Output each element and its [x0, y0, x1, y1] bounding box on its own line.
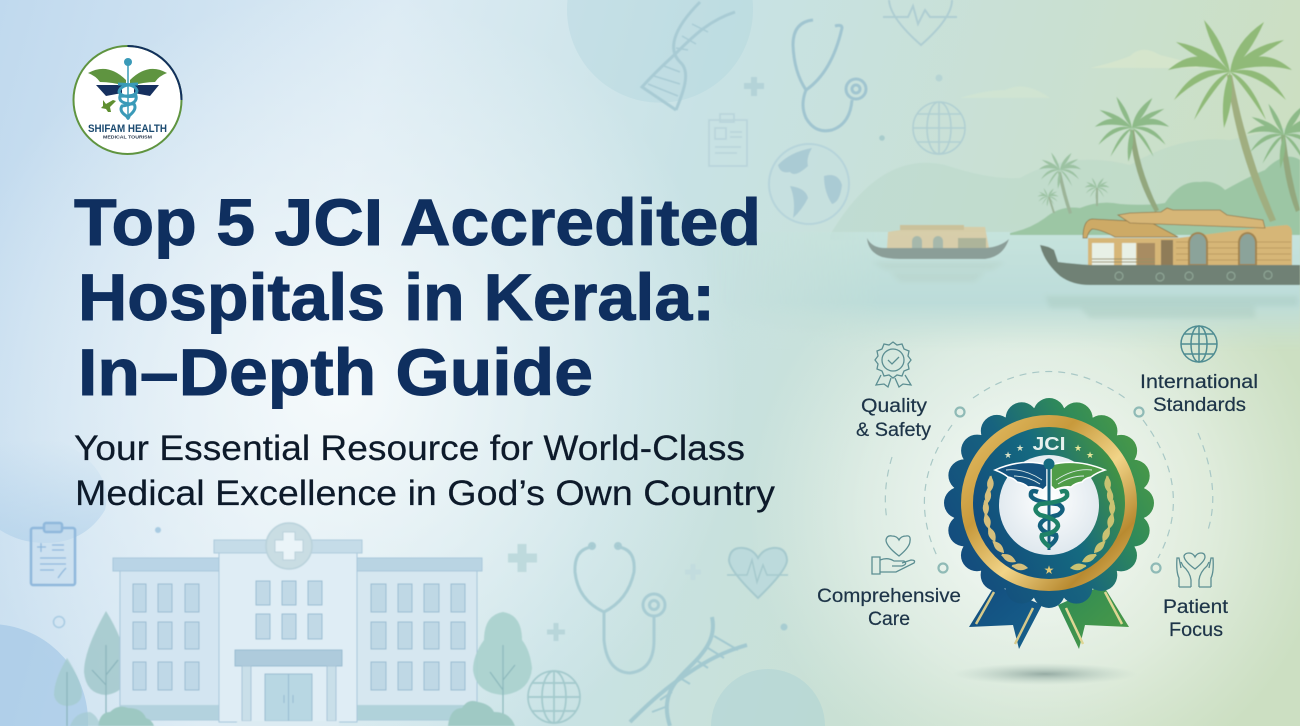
icon: hands and heart — [1177, 553, 1213, 587]
badge shadow — [953, 663, 1137, 685]
hull — [1040, 245, 1300, 285]
arched windows — [1189, 233, 1256, 265]
upper roof — [1118, 208, 1265, 228]
palm: medium — [1095, 97, 1169, 212]
feature: patient focus — [1163, 553, 1229, 641]
large houseboat — [1040, 208, 1300, 285]
icon: hand holding heart — [872, 536, 915, 574]
feature: international standards: Standards — [1153, 395, 1246, 416]
icon: dna — [630, 617, 747, 726]
JCI label: JCI — [1032, 434, 1066, 454]
icon: earth — [769, 144, 849, 224]
JCI badge — [953, 407, 1145, 685]
water — [814, 232, 1300, 335]
logo wings — [88, 69, 167, 96]
kerala backwater scene — [814, 20, 1300, 335]
palm: tall — [1168, 20, 1292, 222]
title: Hospitals in Kerala: — [78, 260, 715, 334]
feature: international standards: International — [1140, 372, 1258, 393]
title — [74, 185, 761, 409]
left wing — [113, 558, 219, 720]
subtitle: Medical Excellence in God’s Own Country — [75, 474, 776, 513]
logo plane — [101, 100, 116, 112]
faint medical icons bottom — [31, 523, 788, 726]
icon: heart pulse — [727, 548, 788, 598]
icon: globe — [528, 671, 580, 723]
icon: plus small — [547, 623, 565, 641]
stars: ★ — [1004, 450, 1012, 460]
white centre — [999, 455, 1099, 555]
stars: ★ — [1016, 443, 1024, 453]
small houseboat reflection — [872, 262, 1005, 282]
mooring rings — [1115, 271, 1272, 281]
dots — [936, 74, 942, 82]
left tree group — [54, 611, 128, 726]
stars: ★ — [1086, 450, 1094, 460]
orbit nodes — [938, 408, 1160, 572]
logo caduceus — [118, 58, 138, 120]
porch openings — [1092, 243, 1114, 265]
right tree and bushes — [70, 612, 532, 726]
icon: stethoscope — [575, 544, 665, 673]
right wing — [357, 558, 482, 720]
icon: clipboard top — [709, 114, 747, 166]
stars: ★ — [1044, 563, 1054, 577]
ribbon right — [1058, 585, 1129, 649]
feature: quality and safety — [856, 342, 932, 441]
island treeline — [1010, 157, 1300, 235]
laurel right — [1070, 475, 1119, 574]
hospital illustration — [54, 523, 532, 726]
icon: wire globe — [913, 102, 965, 154]
icon: clipboard — [31, 523, 75, 585]
logo: Shifam Health — [74, 46, 182, 154]
subtitle — [74, 429, 776, 513]
distant hills — [830, 50, 1300, 240]
caduceus — [995, 458, 1105, 550]
scalloped seal — [953, 407, 1145, 599]
feature: quality and safety: & Safety — [856, 420, 932, 441]
icon: heart pulse top — [883, 0, 957, 45]
faint medical icons top — [642, 0, 965, 224]
feature: comprehensive care: Care — [868, 609, 910, 630]
centre block — [214, 523, 362, 726]
ribbon left — [969, 585, 1042, 649]
palm: right edge — [1247, 104, 1300, 212]
icon: plus left — [508, 544, 537, 572]
stars — [1004, 443, 1094, 577]
icon: dna top — [642, 2, 735, 110]
subtitle: Your Essential Resource for World-Class — [74, 429, 745, 468]
logo tagline: MEDICAL TOURISM — [103, 134, 152, 140]
feature: patient focus: Patient — [1163, 597, 1229, 618]
icon: globe — [1181, 326, 1217, 362]
stars: ★ — [1074, 443, 1082, 453]
icon: stethoscope top — [793, 20, 866, 131]
soft background circles — [0, 0, 825, 726]
feature: quality and safety: Quality — [861, 396, 928, 417]
feature: patient focus: Focus — [1169, 620, 1223, 641]
palm: small group — [1037, 152, 1109, 214]
feature: international standards — [1140, 326, 1258, 416]
feature: comprehensive care — [817, 536, 961, 630]
title: In–Depth Guide — [78, 335, 593, 409]
icon: award rosette — [875, 342, 911, 387]
cabin body — [1088, 225, 1292, 265]
logo text: SHIFAM HEALTH — [88, 123, 167, 135]
feature: comprehensive care: Comprehensive — [817, 586, 961, 607]
dots and rings — [780, 624, 788, 630]
lower roof — [1083, 219, 1178, 238]
laurel left — [979, 475, 1028, 574]
small houseboat — [867, 225, 1009, 259]
large houseboat reflection — [1045, 296, 1298, 318]
icon: plus — [744, 77, 764, 96]
title: Top 5 JCI Accredited — [74, 185, 761, 259]
icon: plus far — [685, 564, 701, 580]
gold ring — [967, 421, 1131, 585]
dashed orbit lines — [885, 372, 1213, 558]
